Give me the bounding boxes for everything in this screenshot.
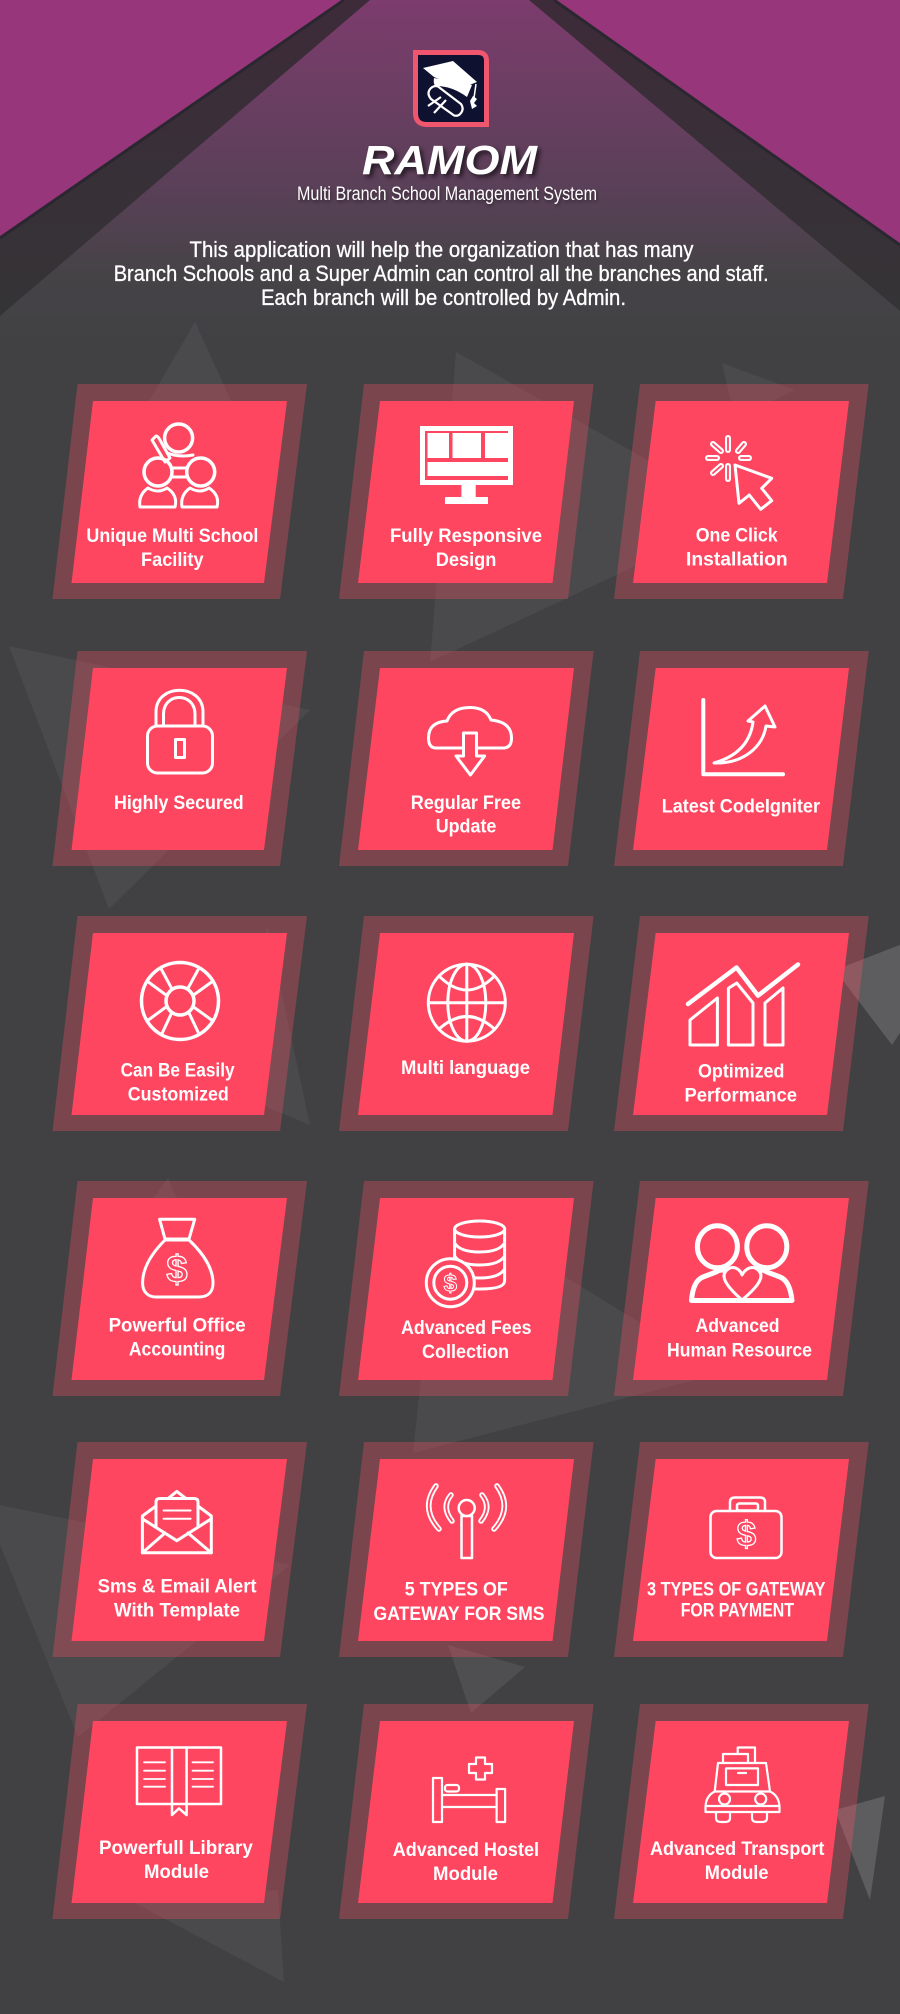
label xyxy=(98,1577,257,1622)
panel: Powerfull Library Module xyxy=(52,1704,307,1919)
label: Can Be Easily xyxy=(121,1061,235,1082)
label: Performance xyxy=(684,1086,797,1107)
panel: Sms & Email Alert With Template xyxy=(52,1442,307,1657)
label: Unique Multi School xyxy=(86,526,258,547)
panel: Fully Responsive Design xyxy=(339,384,594,599)
panel: Advanced Transport Module xyxy=(614,1704,869,1919)
icon: coin stack xyxy=(426,1221,505,1307)
panel: Latest CodeIgniter xyxy=(614,651,869,866)
icon: performance chart xyxy=(688,964,798,1045)
label xyxy=(647,1580,826,1622)
label xyxy=(401,1318,532,1363)
label: Highly Secured xyxy=(114,793,244,814)
icon: multi school people xyxy=(140,424,218,507)
label: Module xyxy=(144,1862,209,1883)
label: Sms & Email Alert xyxy=(98,1577,257,1598)
icon: money bag: $ xyxy=(166,1249,188,1291)
panel: Powerful Office Accounting xyxy=(52,1181,307,1396)
panel: Advanced Hostel Module xyxy=(339,1704,594,1919)
panel: Highly Secured xyxy=(52,651,307,866)
icon: open book xyxy=(137,1748,221,1815)
label: Optimized xyxy=(698,1062,784,1083)
label xyxy=(109,1316,246,1360)
label: 5 TYPES OF xyxy=(405,1580,508,1601)
panel: Advanced Fees Collection xyxy=(339,1181,594,1396)
icon: click cursor xyxy=(708,438,772,509)
label: Module xyxy=(433,1864,498,1885)
icon: lifebuoy xyxy=(142,962,218,1040)
label: 3 TYPES OF GATEWAY xyxy=(647,1580,826,1601)
label: FOR PAYMENT xyxy=(681,1601,794,1622)
icon: briefcase with dollar xyxy=(710,1498,782,1558)
panel: Can Be Easily Customized xyxy=(52,916,307,1131)
label: Installation xyxy=(686,550,788,571)
label: Advanced Fees xyxy=(401,1318,532,1339)
icon: globe xyxy=(428,964,505,1041)
label: Collection xyxy=(422,1342,509,1363)
icon: hospital bed xyxy=(433,1758,505,1822)
label: Powerful Office xyxy=(109,1316,246,1337)
icon: car with luggage xyxy=(706,1748,780,1822)
icon: envelope xyxy=(142,1491,211,1553)
label: Module xyxy=(705,1863,768,1884)
label: Latest CodeIgniter xyxy=(662,797,821,818)
icon: padlock xyxy=(148,690,212,773)
label xyxy=(650,1839,825,1884)
label: Design xyxy=(436,550,496,571)
icon: antenna xyxy=(429,1486,504,1558)
intro paragraph: This application will help the organization that has many xyxy=(190,237,694,262)
label xyxy=(686,526,788,571)
subtitle: Multi Branch School Management System xyxy=(297,184,597,205)
label: Regular Free xyxy=(411,793,521,814)
brand name: RAMOM xyxy=(362,137,538,183)
panel: Unique Multi School Facility xyxy=(52,384,307,599)
label xyxy=(374,1580,544,1625)
panel: 5 Types of Gateway for SMS xyxy=(339,1442,594,1657)
panel: Multi language xyxy=(339,916,594,1131)
logo xyxy=(416,52,486,124)
label xyxy=(667,1316,812,1362)
icon: money bag xyxy=(143,1219,213,1297)
panel: Regular Free Update xyxy=(339,651,594,866)
intro paragraph: Each branch will be controlled by Admin. xyxy=(261,285,626,310)
label: With Template xyxy=(114,1601,240,1622)
icon: cloud download xyxy=(428,708,512,775)
label: Customized xyxy=(128,1085,229,1106)
label xyxy=(390,526,542,571)
label: Advanced Transport xyxy=(650,1839,825,1860)
label: Facility xyxy=(141,550,204,571)
label xyxy=(99,1838,253,1883)
icon: growth chart xyxy=(703,700,783,774)
intro paragraph xyxy=(114,237,769,310)
label: Advanced Hostel xyxy=(393,1840,539,1861)
label: Update xyxy=(436,817,496,838)
intro paragraph: Branch Schools and a Super Admin can control all the branches and staff. xyxy=(114,261,769,286)
label: Advanced xyxy=(696,1316,780,1337)
icon: briefcase with dollar: $ xyxy=(737,1515,756,1554)
label xyxy=(411,793,521,838)
icon: monitor xyxy=(422,428,510,504)
panel: Advanced Human Resource xyxy=(614,1181,869,1396)
panel: One Click Installation xyxy=(614,384,869,599)
label: Powerfull Library xyxy=(99,1838,253,1859)
label: Fully Responsive xyxy=(390,526,542,547)
label: Accounting xyxy=(129,1340,225,1360)
label xyxy=(86,526,258,571)
label xyxy=(684,1062,797,1107)
label: Human Resource xyxy=(667,1341,812,1362)
label: Multi language xyxy=(401,1058,530,1079)
label xyxy=(393,1840,539,1885)
icon: two people and heart xyxy=(692,1226,792,1300)
icon: coin stack: $ xyxy=(444,1270,458,1297)
label: GATEWAY FOR SMS xyxy=(374,1604,544,1625)
label xyxy=(121,1061,235,1106)
panel: 3 Types of Gateway for Payment xyxy=(614,1442,869,1657)
header background xyxy=(0,0,900,340)
label: One Click xyxy=(696,526,778,547)
panel: Optimized Performance xyxy=(614,916,869,1131)
